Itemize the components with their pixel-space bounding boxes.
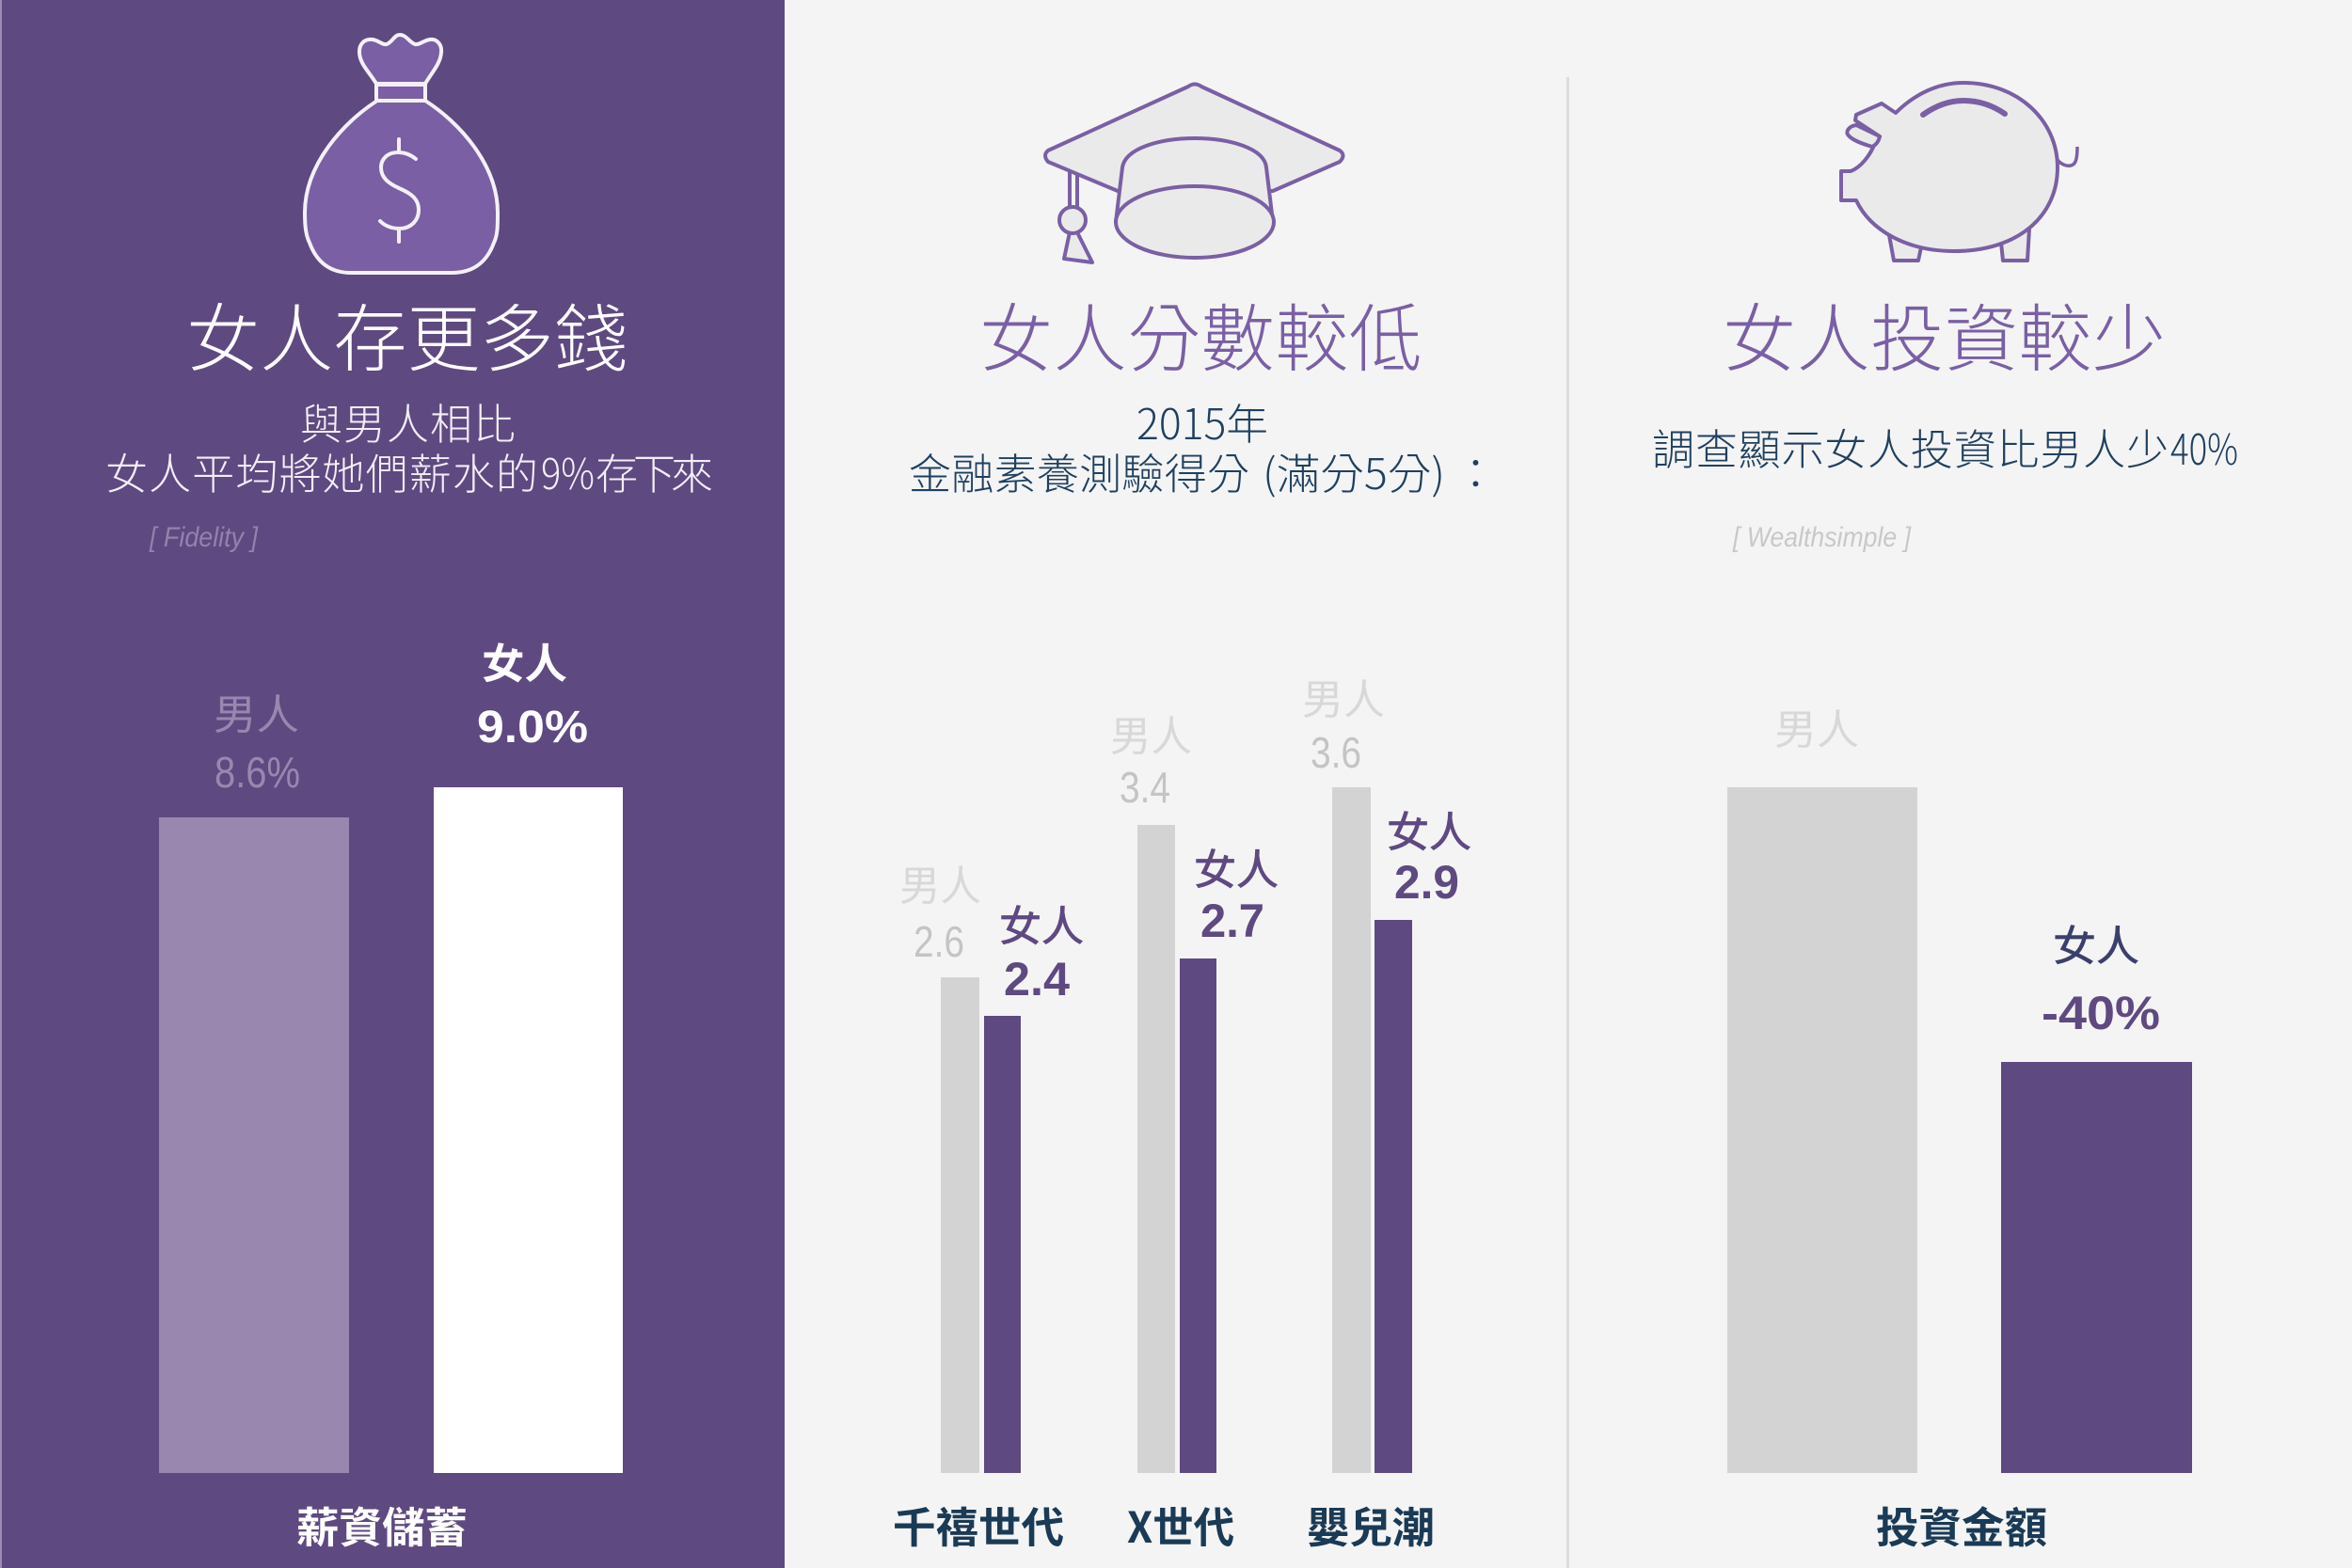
panel: women invest less <box>1652 83 2238 1555</box>
value: women 9.0%: 9.0% <box>477 703 588 752</box>
labels: millennials: 男人 <box>899 852 981 912</box>
text block: savings description: 與男人相比 <box>300 390 516 451</box>
labels: baby boomers: 2.9 <box>1394 856 1459 909</box>
bar: men 8.6% <box>159 817 349 1473</box>
bar: men <box>1727 787 1917 1473</box>
bar chart: salary savings <box>159 630 623 1473</box>
label: women: 女人 <box>2053 912 2139 973</box>
axis labels: generations: 千禧世代 <box>893 1494 1064 1555</box>
text block: test description: (滿分5分) <box>1263 440 1445 501</box>
labels: baby boomers: 男人 <box>1302 666 1385 726</box>
axis label: investment amount: 投資金額 <box>1876 1494 2047 1555</box>
label: men: 男人 <box>214 681 299 741</box>
bars: baby boomers <box>1332 787 1412 1473</box>
labels: millennials: 女人 <box>999 893 1084 953</box>
bars: generation X <box>1137 825 1216 1473</box>
text block: survey description: 調查顯示女人投資比男人少 <box>1652 416 2169 477</box>
text block: savings description: 女人平均將她們薪水的 <box>105 440 538 501</box>
text block: savings description: 存下來 <box>596 440 713 501</box>
panel: women score lower <box>893 85 1497 1555</box>
labels: millennials: 2.4 <box>1004 953 1070 1006</box>
axis labels: generations <box>893 1494 1435 1555</box>
label: women: 女人 <box>482 630 567 690</box>
bar: women 9.0% <box>434 787 623 1473</box>
panel: women save more <box>0 0 785 1568</box>
labels: millennials <box>899 852 1084 1006</box>
label: men: 男人 <box>1774 696 1859 756</box>
value: men 8.6%: 8.6% <box>215 748 300 797</box>
source: Fidelity: [ Fidelity ] <box>149 522 259 553</box>
text block: savings description <box>105 390 713 501</box>
labels: generation X <box>1110 703 1279 947</box>
labels: generation X: 女人 <box>1194 836 1279 896</box>
text block: test description <box>909 390 1497 501</box>
labels: baby boomers <box>1302 666 1471 909</box>
bars: millennials <box>941 977 1021 1473</box>
labels: baby boomers: 女人 <box>1387 799 1471 859</box>
text block: test description: 金融素養測驗得分 <box>909 440 1249 501</box>
labels: generation X: 3.4 <box>1120 763 1170 812</box>
labels: generation X: 男人 <box>1110 703 1192 763</box>
text block: savings description: 9% <box>541 440 595 501</box>
text block: survey description: 40% <box>2170 416 2238 477</box>
labels: baby boomers: 3.6 <box>1311 728 1361 777</box>
labels: millennials: 2.6 <box>914 917 964 966</box>
bar: women -40% <box>2001 1062 2192 1473</box>
bar chart: investment amount <box>1727 696 2192 1473</box>
axis labels: generations: 嬰兒潮 <box>1307 1494 1435 1555</box>
source: Wealthsimple: [ Wealthsimple ] <box>1732 522 1912 553</box>
icon: piggy bank <box>1841 83 2077 261</box>
labels: generation X: 2.7 <box>1200 895 1264 947</box>
text block: test description: 2015年 <box>1136 390 1268 451</box>
heading: women invest less: 女人投資較少 <box>1723 281 2166 387</box>
axis label: salary savings: 薪資儲蓄 <box>296 1494 468 1555</box>
heading: women save more: 女人存更多錢 <box>186 281 628 387</box>
axis labels: generations: X世代 <box>1127 1494 1234 1555</box>
heading: women score lower: 女人分數較低 <box>979 281 1422 387</box>
value: women -40%: -40% <box>2042 987 2160 1039</box>
icon: graduation cap <box>1045 85 1343 262</box>
icon: money bag <box>305 35 498 273</box>
text block: test description: ： <box>1454 440 1497 501</box>
bar chart: generation scores <box>899 666 1471 1473</box>
